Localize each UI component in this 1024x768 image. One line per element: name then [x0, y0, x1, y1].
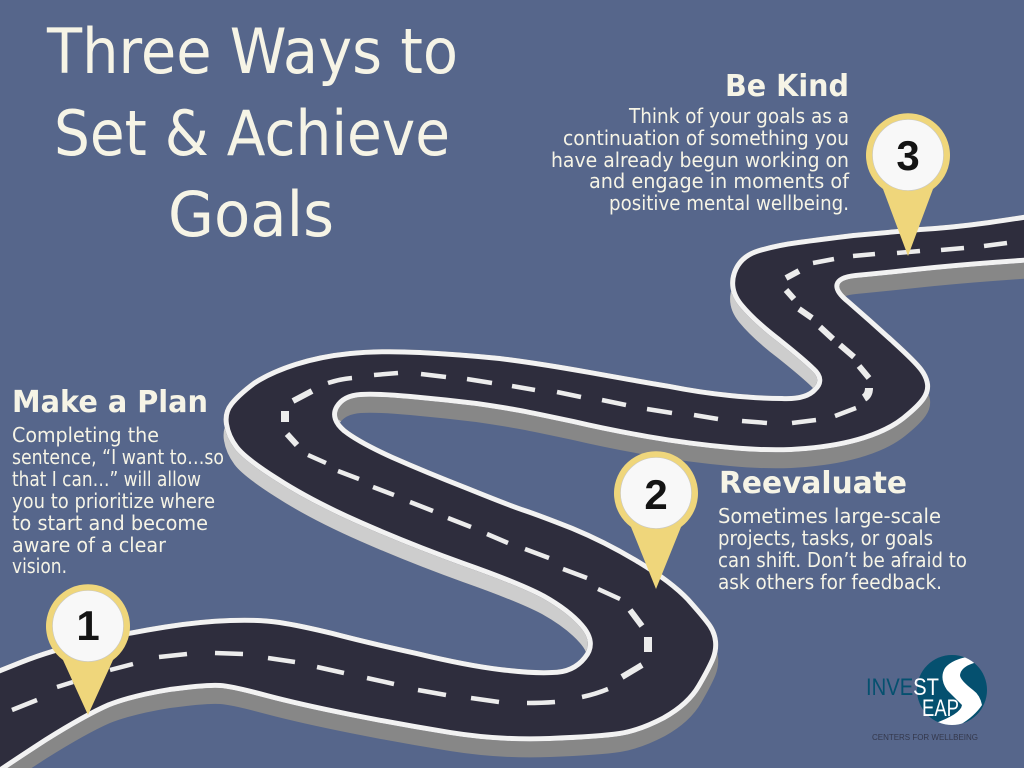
logo wordmark: INVEST — [866, 674, 939, 701]
step 1 body: that I can…” will allow — [12, 467, 201, 491]
logo tagline: CENTERS FOR WELLBEING — [872, 733, 978, 742]
road white edge — [0, 213, 1024, 768]
title: Goals — [168, 178, 334, 251]
map pin 1 — [46, 584, 130, 715]
step 3 text — [551, 69, 850, 215]
step 2 body — [718, 504, 967, 594]
step 3 heading: Be Kind — [725, 69, 849, 104]
road side wall: light — [224, 291, 818, 652]
step 1 text — [12, 385, 224, 578]
map pin 3 — [866, 113, 950, 256]
logo: Invest EAP — [866, 655, 987, 742]
step 1 body — [12, 423, 224, 578]
title: Three Ways to — [46, 15, 458, 88]
map pin 2: 2 — [644, 471, 668, 518]
step 1 body: sentence, “I want to…so — [12, 445, 224, 469]
road surface — [0, 213, 1024, 768]
road side wall: dark — [0, 229, 1024, 768]
step 3 body: positive mental wellbeing. — [609, 191, 849, 215]
step 2 body: projects, tasks, or goals — [718, 526, 933, 550]
step 3 body: have already begun working on — [551, 148, 849, 172]
step 1 body: Completing the — [12, 423, 159, 447]
logo white S road — [938, 658, 982, 725]
map pin 3: 3 — [896, 132, 920, 179]
step 3 body: and engage in moments of — [589, 169, 850, 193]
road centre dashes — [12, 243, 1007, 710]
step 3 body: Think of your goals as a — [628, 104, 849, 128]
step 2 body: ask others for feedback. — [718, 570, 942, 594]
step 1 body: vision. — [12, 554, 67, 578]
title — [46, 15, 458, 251]
step 1 body: to start and become — [12, 511, 208, 535]
map pin 2 — [614, 451, 698, 589]
step 2 heading: Reevaluate — [719, 466, 907, 501]
step 1 heading: Make a Plan — [12, 385, 208, 420]
logo EAP: EAP — [922, 695, 959, 722]
map pin 1: 1 — [76, 602, 100, 649]
step 2 body: can shift. Don’t be afraid to — [718, 548, 967, 572]
step 2 text — [718, 466, 967, 594]
step 3 body — [551, 104, 850, 215]
title: Set & Achieve — [54, 97, 450, 170]
winding road — [0, 213, 1024, 768]
step 2 body: Sometimes large-scale — [718, 504, 941, 528]
logo circle — [917, 655, 987, 725]
step 1 body: you to prioritize where — [12, 489, 215, 513]
step 1 body: aware of a clear — [12, 533, 167, 557]
step 3 body: continuation of something you — [563, 126, 849, 150]
